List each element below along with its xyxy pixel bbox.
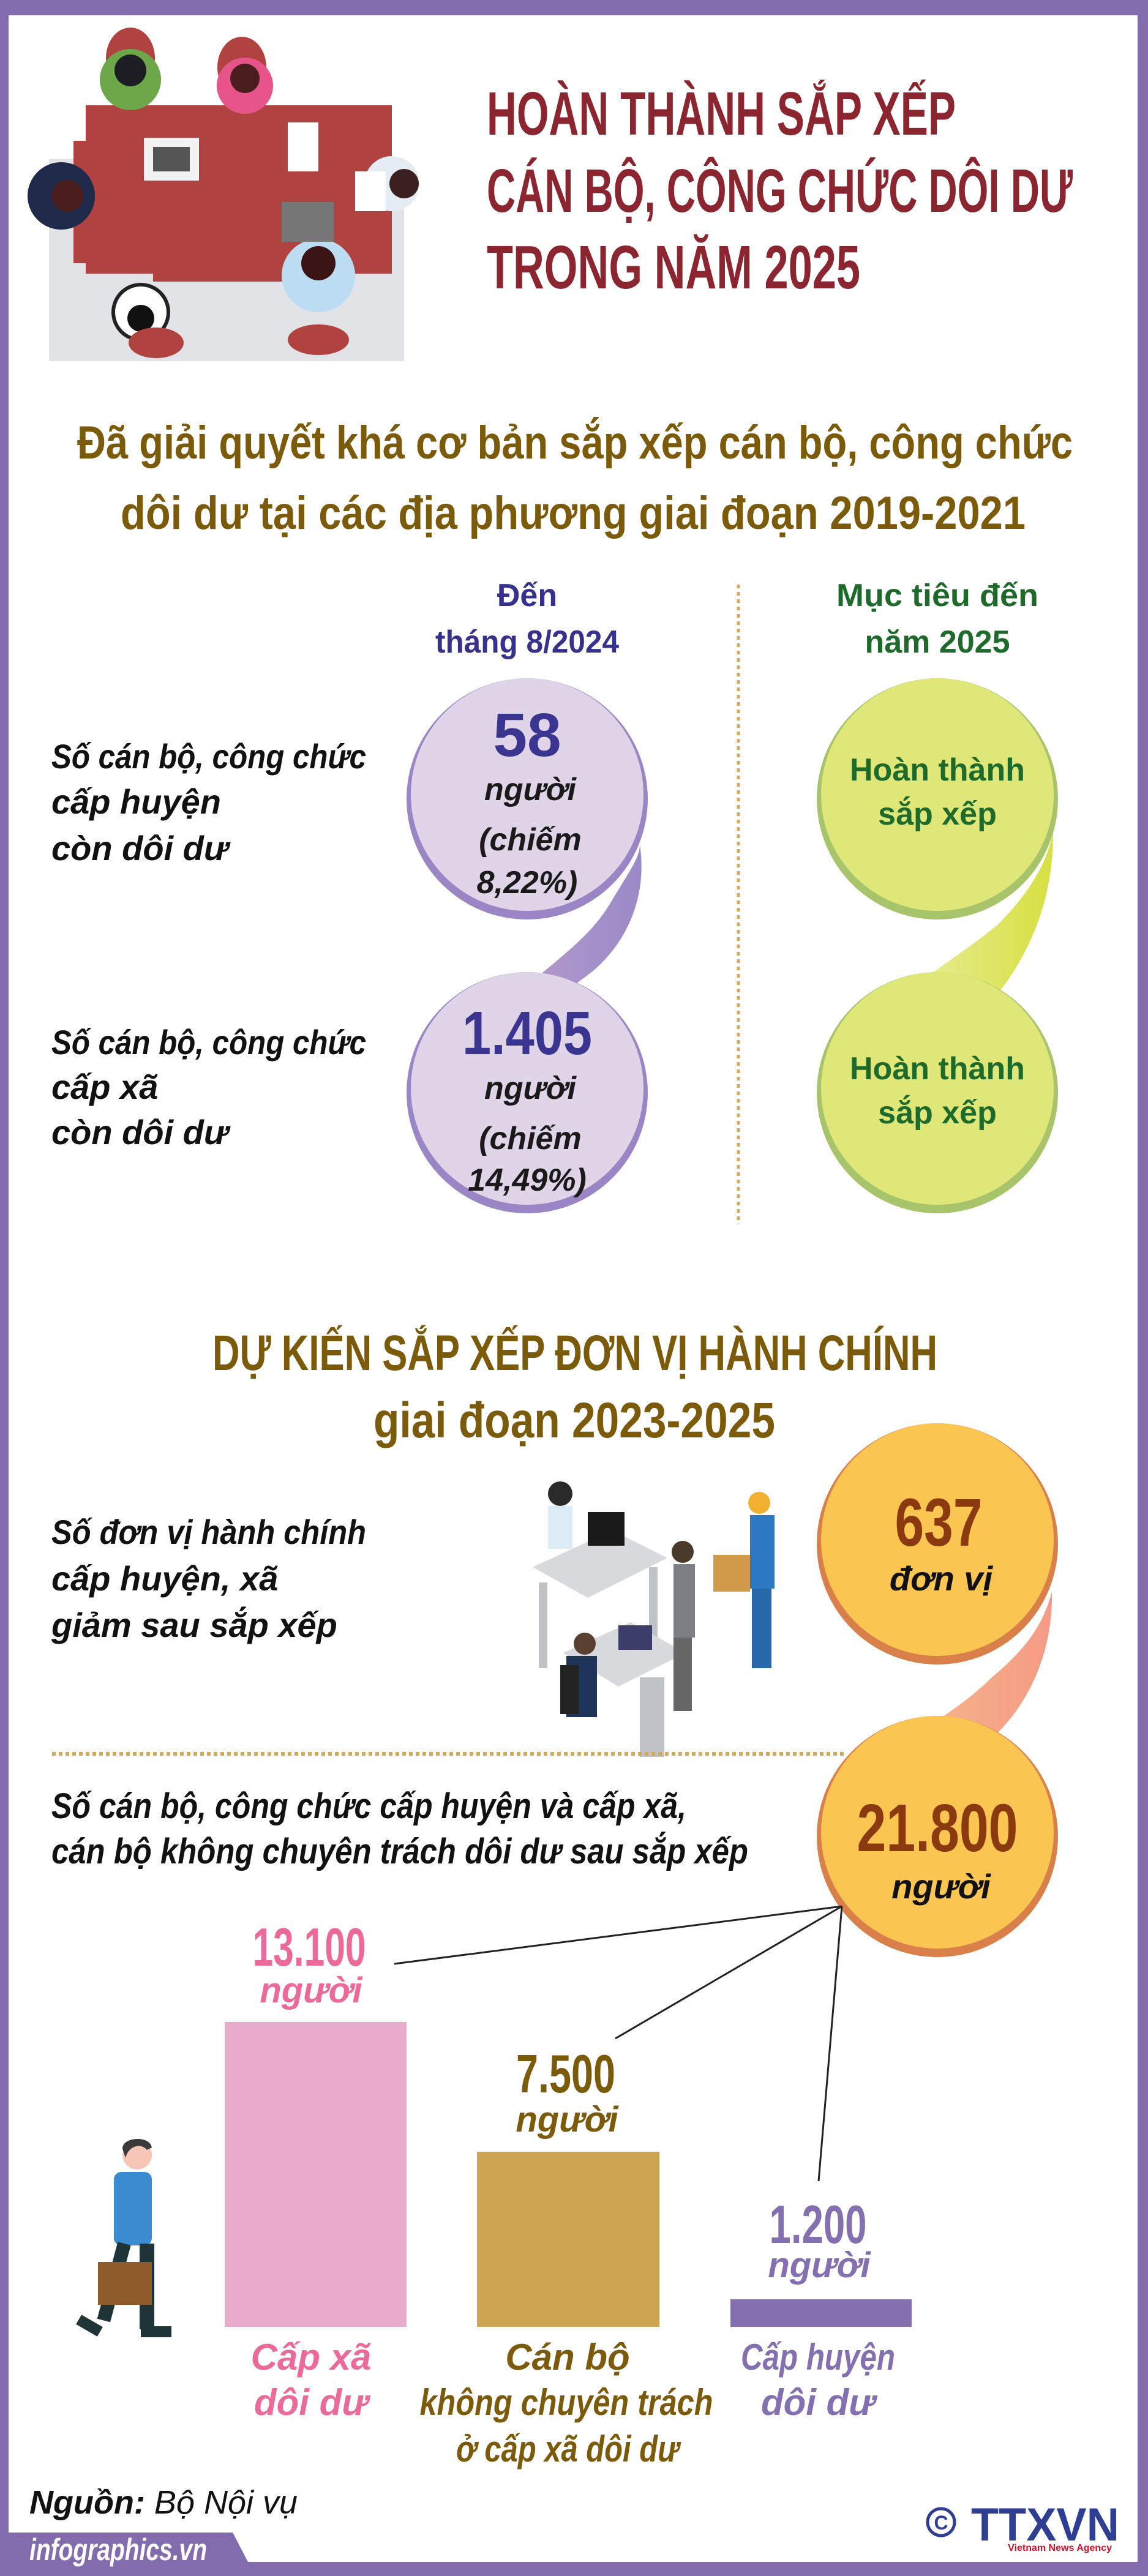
label: cán bộ dôi dư sau sắp xếp: Số cán bộ, công chức cấp huyện và cấp xã, — [51, 1786, 686, 1826]
label: đơn vị hành chính: Số đơn vị hành chính — [51, 1513, 366, 1551]
circle: 637 đơn vị: 637 — [895, 1485, 982, 1560]
label: cấp huyện: còn dôi dư — [51, 829, 231, 867]
ribbon green — [876, 833, 1053, 1016]
column header: Mục tiêu đến năm 2025 — [836, 578, 1038, 660]
bar: Cấp xã 13.100: người — [260, 1971, 364, 2010]
label: đơn vị hành chính: giảm sau sắp xếp — [51, 1606, 337, 1644]
bar: Cấp huyện 1.200: 1.200 — [769, 2194, 867, 2255]
circle: 1.405 người: người — [484, 1071, 577, 1106]
subtitle section 1: dôi dư tại các địa phương giai đoạn 2019-2021 — [121, 487, 1026, 539]
title: TRONG NĂM 2025 — [487, 233, 860, 302]
bar: Cán bộ không chuyên trách 7.500: 7.500 — [516, 2043, 615, 2104]
circle: 637 đơn vị: đơn vị — [890, 1559, 994, 1598]
circle: 58 người — [407, 678, 648, 919]
circle: green target 1: sắp xếp — [878, 796, 997, 832]
label: cấp xã — [51, 1023, 366, 1151]
bar: Cấp xã 13.100: dôi dư — [254, 2382, 370, 2423]
circle: green target 1 — [817, 678, 1058, 919]
circle: 58 người: (chiếm — [479, 822, 582, 858]
label: đơn vị hành chính: cấp huyện, xã — [51, 1559, 278, 1598]
bar: Cấp huyện 1.200: Cấp huyện — [741, 2337, 895, 2378]
bar: Cấp xã 13.100: Cấp xã — [251, 2337, 371, 2378]
bar: Cán bộ không chuyên trách 7.500: Cán bộ — [505, 2337, 630, 2378]
bar: Cán bộ không chuyên trách 7.500: người — [516, 2100, 620, 2140]
bar: Cấp huyện 1.200: người — [768, 2245, 872, 2285]
bar: Cấp xã 13.100: 13.100 — [252, 1917, 366, 1977]
section 2 title: giai đoạn 2023-2025 — [373, 1393, 775, 1448]
section 2 title — [212, 1325, 937, 1448]
circle: 58 người: người — [484, 772, 577, 807]
section 2 title: DỰ KIẾN SẮP XẾP ĐƠN VỊ HÀNH CHÍNH — [212, 1325, 937, 1381]
circle: 1.405 người — [407, 972, 648, 1213]
ribbon purple — [508, 845, 642, 1013]
circle: green target 2: Hoàn thành — [850, 1051, 1025, 1087]
bar: Cấp xã 13.100 — [225, 1917, 407, 2423]
circle: 21.800 người: 21.800 — [857, 1791, 1018, 1866]
footer tab: infographics.vn: infographics.vn — [29, 2533, 207, 2567]
label: cán bộ dôi dư sau sắp xếp — [51, 1786, 748, 1871]
circle: 1.405 người: 1.405 — [462, 999, 592, 1068]
illustration: office workers — [533, 1481, 775, 1757]
title — [487, 79, 1073, 302]
bar chart — [225, 1917, 912, 2469]
logo: TTXVN: Vietnam News Agency — [1008, 2543, 1112, 2553]
circle: 1.405 người: (chiếm — [479, 1121, 582, 1156]
ribbon orange — [869, 1592, 1052, 1763]
column header: Mục tiêu đến năm 2025: năm 2025 — [865, 624, 1010, 660]
bar: Cấp huyện 1.200 — [730, 2194, 912, 2423]
bar: Cán bộ không chuyên trách 7.500: ở cấp xã dôi dư — [456, 2428, 681, 2469]
source note: Nguồn: Bộ Nội vụ — [29, 2484, 298, 2521]
label: cấp huyện: cấp huyện — [51, 782, 221, 821]
illustration: meeting table — [28, 28, 419, 361]
circle: 637 đơn vị — [817, 1423, 1058, 1664]
circle: green target 1: Hoàn thành — [850, 752, 1025, 788]
logo: TTXVN: C — [934, 2512, 948, 2534]
circle: green target 2 — [817, 972, 1058, 1213]
illustration: walking man with briefcase — [76, 2139, 171, 2337]
label: cấp huyện — [51, 737, 366, 867]
circle: 58 người: 8,22%) — [477, 865, 577, 900]
circle: 21.800 người: người — [891, 1867, 991, 1906]
label: cấp xã: cấp xã — [51, 1068, 158, 1106]
divider vertical dotted — [737, 585, 740, 1224]
connector lines — [394, 1906, 842, 2181]
subtitle section 1 — [77, 417, 1073, 539]
divider horizontal dotted — [52, 1752, 845, 1756]
logo: TTXVN: TTXVN — [971, 2499, 1119, 2551]
label: cấp xã: Số cán bộ, công chức — [51, 1023, 366, 1061]
column header: Đến tháng 8/2024: Đến — [497, 578, 557, 613]
column header: Mục tiêu đến năm 2025: Mục tiêu đến — [836, 578, 1038, 613]
circle: 1.405 người: 14,49%) — [468, 1163, 587, 1198]
column header: Đến tháng 8/2024: tháng 8/2024 — [435, 624, 619, 660]
label: cán bộ dôi dư sau sắp xếp: cán bộ không chuyên trách dôi dư sau sắp xếp — [51, 1832, 748, 1871]
bar: Cán bộ không chuyên trách 7.500 — [420, 2043, 713, 2469]
label: cấp xã: còn dôi dư — [51, 1113, 231, 1151]
circle: 58 người: 58 — [493, 701, 561, 769]
label: đơn vị hành chính — [51, 1513, 366, 1644]
bar: Cán bộ không chuyên trách 7.500: không chuyên trách — [420, 2382, 713, 2423]
circle: 21.800 người — [817, 1716, 1058, 1957]
column header: Đến tháng 8/2024 — [435, 578, 619, 660]
circle: green target 2: sắp xếp — [878, 1095, 997, 1131]
bar: Cấp huyện 1.200: dôi dư — [761, 2382, 877, 2423]
label: cấp huyện: Số cán bộ, công chức — [51, 737, 366, 776]
